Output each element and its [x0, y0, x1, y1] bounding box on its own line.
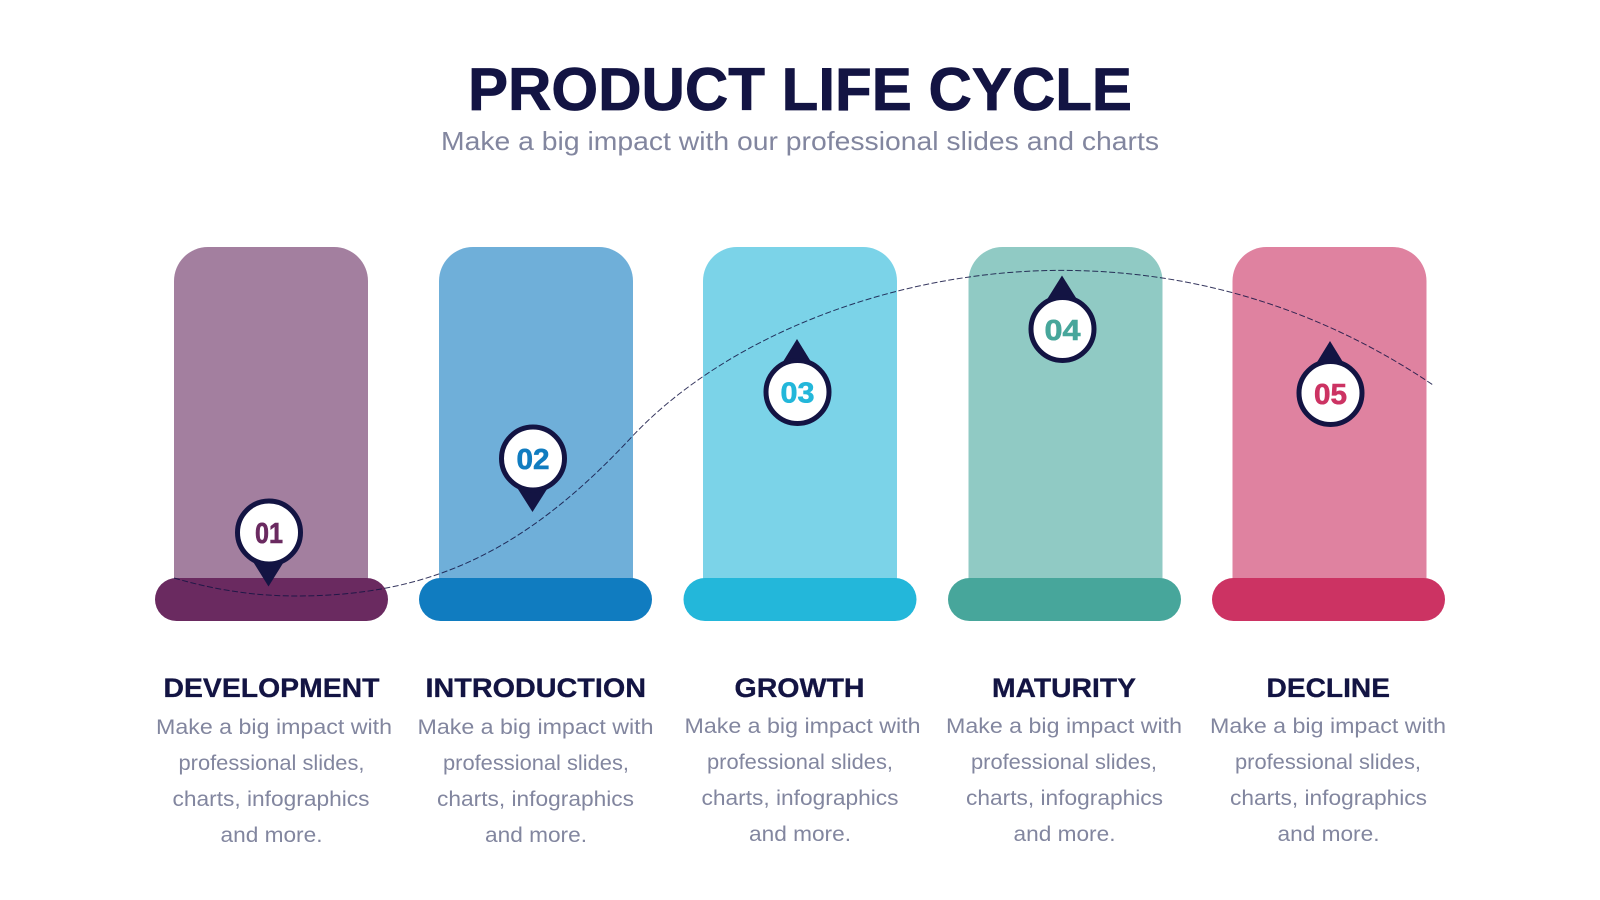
text block: decline: Make a big impact with [1210, 714, 1446, 738]
text block: introduction: professional slides, [443, 751, 629, 775]
pin 05 [1299, 341, 1362, 424]
life cycle dashed curve [174, 270, 1433, 596]
text block: growth: Make a big impact with [684, 714, 920, 738]
text block: growth: professional slides, [707, 750, 893, 774]
text block: maturity: MATURITY [992, 673, 1136, 703]
panel: growth column [684, 247, 916, 621]
pin 04: 04 [1044, 315, 1080, 347]
panel: development column [155, 247, 388, 621]
text block: development: DEVELOPMENT [164, 673, 380, 703]
text block: maturity: professional slides, [971, 750, 1157, 774]
text block: decline: DECLINE [1266, 673, 1390, 703]
title: PRODUCT LIFE CYCLE [468, 56, 1132, 123]
text block: maturity: and more. [1014, 822, 1116, 846]
text block: introduction: charts, infographics [437, 787, 634, 811]
pin 03 [766, 339, 829, 424]
text block: decline: and more. [1278, 822, 1380, 846]
text block: decline [1210, 673, 1446, 846]
text block: development: professional slides, [178, 751, 364, 775]
text block: decline: charts, infographics [1230, 786, 1427, 810]
pin 03: 03 [780, 378, 814, 410]
pin 04 [1031, 276, 1094, 360]
text block: development: and more. [220, 823, 322, 847]
text block: introduction: Make a big impact with [418, 715, 654, 739]
text block: growth: GROWTH [734, 673, 864, 703]
text block: maturity: charts, infographics [966, 786, 1163, 810]
pin 01 [238, 501, 300, 586]
panel: maturity column [948, 247, 1181, 621]
text block: development: Make a big impact with [156, 715, 392, 739]
text block: development: charts, infographics [172, 787, 370, 811]
subtitle: Make a big impact with our professional slides and charts [441, 126, 1159, 156]
pin 02: 02 [516, 444, 550, 476]
text block: growth: charts, infographics [702, 786, 898, 810]
text block: introduction [418, 673, 654, 847]
text block: growth: and more. [749, 822, 851, 846]
text block: decline: professional slides, [1235, 750, 1421, 774]
pin 01: 01 [255, 518, 283, 550]
panel: decline column [1212, 247, 1445, 621]
text block: growth [684, 673, 920, 846]
pin 05: 05 [1314, 379, 1347, 411]
text block: introduction: and more. [485, 823, 587, 847]
text block: introduction: INTRODUCTION [426, 673, 646, 703]
text block: development [156, 673, 392, 847]
panel: introduction column [419, 247, 652, 621]
text block: maturity: Make a big impact with [946, 714, 1182, 738]
pin 02 [502, 427, 564, 512]
text block: maturity [946, 673, 1182, 846]
